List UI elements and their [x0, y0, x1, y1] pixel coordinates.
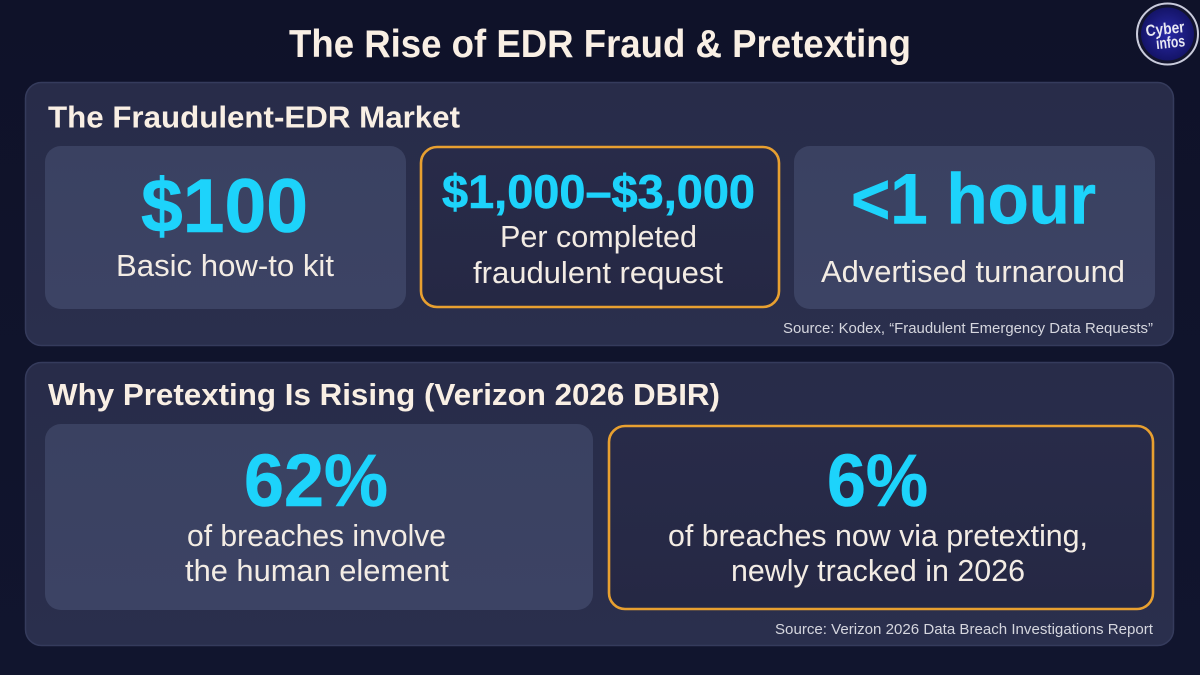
card: basic kit price — [45, 146, 406, 309]
card: human element: the human element — [185, 553, 449, 588]
heading: market: The Fraudulent-EDR Market — [48, 100, 460, 134]
card: price per request: Per completed — [500, 219, 697, 254]
card: turnaround: Advertised turnaround — [821, 254, 1125, 289]
card: price per request — [421, 147, 779, 307]
card: pretexting share: newly tracked in 2026 — [731, 553, 1025, 588]
card: basic kit price: Basic how-to kit — [116, 248, 334, 283]
title: The Rise of EDR Fraud & Pretexting — [289, 23, 911, 66]
icon: Cyber Infos logo — [1137, 4, 1198, 64]
source: Verizon: Source: Verizon 2026 Data Breach Investigations Report — [775, 621, 1154, 638]
card: basic kit price: $100 — [141, 164, 308, 249]
icon: Cyber Infos logo: infos — [1155, 33, 1186, 53]
card: pretexting share: of breaches now via pretexting, — [668, 518, 1088, 553]
card: turnaround — [794, 146, 1155, 309]
card: human element: 62% — [244, 439, 388, 522]
card: price per request: $1,000–$3,000 — [442, 165, 755, 218]
card: pretexting share: 6% — [827, 439, 928, 522]
panel: why pretexting is rising — [26, 362, 1174, 646]
card: human element: of breaches involve — [187, 518, 446, 553]
card: pretexting share — [609, 426, 1153, 609]
heading: pretexting: Why Pretexting Is Rising (Verizon 2026 DBIR) — [48, 377, 720, 412]
card: human element — [45, 424, 593, 610]
source: Kodex: Source: Kodex, “Fraudulent Emergency Data Requests” — [783, 320, 1153, 337]
icon: Cyber Infos logo: Cyber — [1145, 19, 1185, 40]
panel: fraudulent EDR market — [26, 82, 1174, 346]
card: price per request: fraudulent request — [473, 255, 723, 290]
card: turnaround: <1 hour — [851, 160, 1096, 240]
